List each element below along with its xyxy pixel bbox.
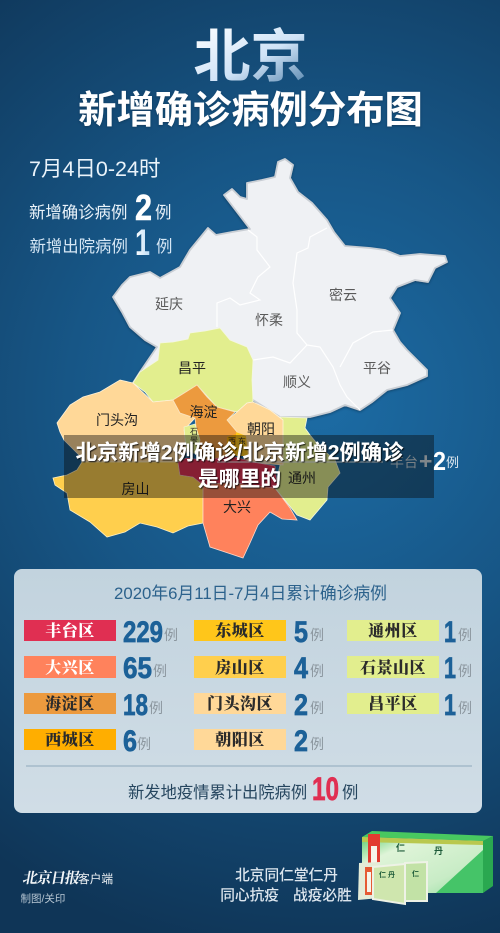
row: Chaoyang: 2 [294,725,308,758]
row: Haidian: 例 [149,700,163,716]
discharged total: 例 [342,784,358,802]
row: Dongcheng: 5 [294,616,308,649]
box: 丹 [434,846,443,856]
callout: Fengtai plus 2 [217,446,459,476]
map labels: 密云 [329,287,357,303]
row: Haidian [24,689,163,722]
row: Changping: 昌平区 [368,694,418,713]
callout: Fengtai plus 2: 丰台 [390,454,418,470]
map: Changping [133,328,253,412]
headline banner overlay: 是哪里的 [198,468,281,491]
row: Fengtai: 229 [123,616,163,649]
map labels: 昌平 [178,360,206,376]
discharged total: 10 [312,771,339,807]
sachets [358,862,427,904]
map: Haidian [173,385,237,462]
map labels: 朝阳 [247,421,275,437]
footer: slogan: 同心抗疫 战疫必胜 [220,886,352,904]
row: Shijingshan: 石景山区 [360,658,426,677]
row: Changping: 1 [444,689,456,722]
row: Shijingshan: 例 [458,663,472,679]
row: Daxing: 大兴区 [45,658,95,677]
panel heading: 2020年6月11日-7月4日累计确诊病例 [114,584,387,603]
row: Mentougou: 例 [310,700,324,716]
map labels: 西 [228,437,236,446]
title [78,25,423,132]
sachets: 仁 丹 [379,870,395,879]
map: Daxing [203,482,297,558]
row: Haidian: 海淀区 [45,694,95,713]
footer: slogan [220,866,352,904]
map labels: 门头沟 [96,412,138,428]
map labels: 景 [190,436,198,445]
row: Fengtai: 例 [164,627,178,643]
map: internal borders north [217,228,393,410]
row: Daxing: 例 [153,663,167,679]
callout: Fengtai plus 2: 2 [433,446,446,476]
map of Beijing districts [53,159,459,558]
row: Mentougou: 门头沟区 [207,694,273,713]
map labels: 东 [238,436,246,446]
row: Changping: 例 [458,700,472,716]
heading: Beijing: 北京 [194,25,308,89]
map: northern districts [113,159,447,417]
new discharged cases [30,222,172,263]
row: Fangshan [194,652,324,685]
row: Tongzhou: 1 [444,616,456,649]
row: Haidian: 18 [123,689,148,722]
row: Chaoyang: 朝阳区 [215,730,265,749]
row: Daxing: 65 [123,652,152,685]
row: Xicheng: 西城区 [45,730,95,749]
row: Chaoyang: 例 [310,736,324,752]
row: Dongcheng [194,616,324,649]
map labels [96,287,391,515]
row: Mentougou: 2 [294,689,308,722]
panel: cumulative cases [14,569,482,813]
summary: daily figures [29,157,172,263]
row: Chaoyang [194,725,324,758]
new confirmed cases [29,187,171,228]
row: Fangshan: 例 [310,663,324,679]
headline banner overlay: 北京新增2例确诊/北京新增2例确诊 [76,440,404,464]
footer: slogan: 北京同仁堂仁丹 [235,866,338,884]
footer: publisher [20,869,113,905]
row: Daxing [24,652,167,685]
date: 7月4日0-24时 [29,157,160,181]
map labels: 平谷 [363,360,391,376]
box: 仁 [396,842,405,853]
row: Xicheng: 6 [123,725,137,758]
row: Dongcheng: 例 [310,627,324,643]
new discharged cases: 1 [135,222,150,263]
discharged total [128,771,358,807]
callout: Fengtai plus 2: + [419,448,432,474]
credit: 制图/关印 [20,892,65,905]
new confirmed cases: 2 [135,187,152,228]
row: Tongzhou: 例 [458,627,472,643]
logo [21,869,113,887]
row: Xicheng: 例 [137,736,151,752]
box [362,831,493,893]
row: Shijingshan: 1 [444,652,456,685]
row: Tongzhou [347,616,472,649]
map: Fengtai [178,456,277,488]
map: Fangshan [53,462,207,537]
map labels: 怀柔 [255,312,283,328]
row: Mentougou [194,689,324,722]
row: Shijingshan [347,652,472,685]
row: Tongzhou: 通州区 [368,621,418,640]
headline banner overlay [64,435,434,498]
row: Fengtai [24,616,178,649]
row: Xicheng [24,725,151,758]
row: Fangshan: 4 [294,652,308,685]
map labels: 顺义 [283,374,311,390]
new discharged cases: 例 [156,238,172,256]
discharged total: 新发地疫情累计出院病例 [128,784,307,802]
sachets: 仁 [412,869,419,878]
row: Dongcheng: 东城区 [215,621,265,640]
new confirmed cases: 例 [155,204,171,222]
map: Chaoyang [227,402,283,465]
product: medicine box and sachets [358,831,493,904]
map: Tongzhou [275,417,340,520]
map: Shijingshan [184,424,200,455]
callout: Fengtai plus 2: 例 [446,455,459,470]
heading: subtitle: 新增确诊病例分布图 [78,89,423,132]
logo: 客户端 [78,872,113,886]
map labels: 海淀 [190,404,218,420]
row: Fengtai: 丰台区 [45,621,95,640]
new discharged cases: 新增出院病例 [30,238,128,256]
map labels: 通州 [288,470,316,486]
logo: 北京日报 [21,869,81,887]
map: Mentougou [57,380,195,462]
map labels: 石 [190,427,198,436]
map labels: 大兴 [223,499,251,515]
row: Changping [347,689,472,722]
map labels: 房山 [122,481,150,497]
row: Fangshan: 房山区 [215,658,265,677]
map labels: 延庆 [155,296,183,312]
new confirmed cases: 新增确诊病例 [29,204,127,222]
map: Xicheng and Dongcheng [227,432,248,456]
